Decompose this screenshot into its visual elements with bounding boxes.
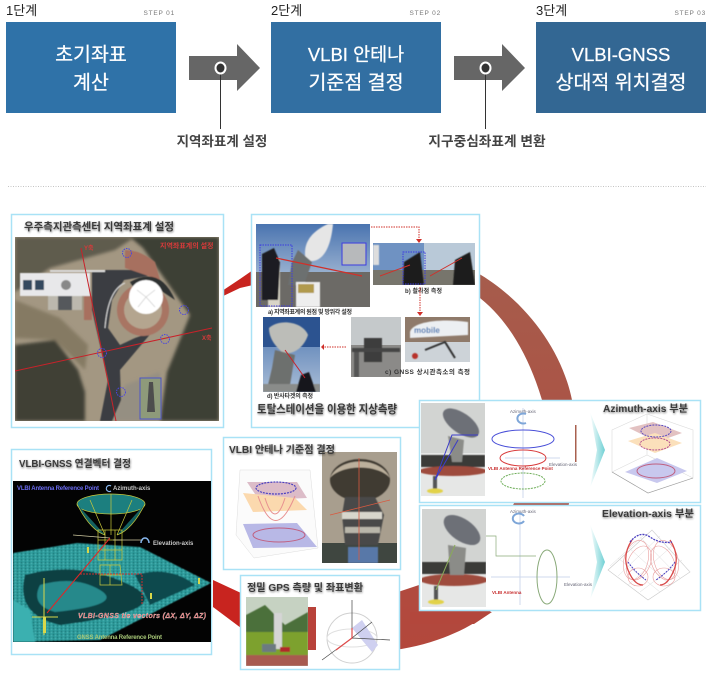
step 1 label: 1단계 (6, 3, 37, 18)
antenna render (421, 403, 485, 496)
antenna render (422, 509, 486, 607)
3D plot (612, 414, 693, 493)
axis ellipses (492, 408, 560, 498)
step 1 box: 계산 (73, 72, 109, 94)
aerial photo: Y축 (84, 244, 94, 252)
step 3 box (536, 22, 706, 113)
step 3 box: VLBI-GNSS (572, 44, 670, 65)
panel title: VLBI-GNSS 연결벡터 결정 (19, 457, 131, 470)
teal arrow (590, 524, 605, 600)
axes and ellipse (486, 512, 570, 605)
azimuth label: Azimuth-axis (510, 509, 537, 514)
panel: elevation-axis (420, 506, 700, 610)
panel: total station survey (252, 214, 480, 428)
photo a (256, 224, 370, 307)
callout: local coordinate setting: 지역좌표계 설정 (177, 134, 267, 149)
step 1 label: STEP 01 (144, 10, 175, 17)
3D plot (236, 470, 318, 558)
point cloud image: VLBI-GNSS tie vectors (ΔX, ΔY, ΔZ) (78, 613, 207, 620)
photo c right (405, 317, 470, 362)
panel title: 정밀 GPS 측량 및 좌표변환 (247, 581, 363, 594)
brown strip (575, 425, 576, 462)
panel: azimuth-axis (419, 400, 700, 502)
antenna photo (322, 452, 397, 563)
step 3 label: STEP 03 (674, 10, 706, 17)
photo c right: mobile (414, 326, 440, 335)
step 2 box: VLBI 안테나 (308, 44, 404, 65)
reference point label: VLBI Antenna (492, 590, 522, 595)
coordinate diagram (322, 600, 390, 663)
aerial photo (15, 237, 219, 421)
aerial photo: 지역좌표계의 설정 (160, 241, 213, 250)
azimuth icon (513, 514, 524, 524)
photo c left (351, 317, 401, 377)
arrow 1 with callout (189, 44, 260, 129)
panel: local coordinate system (12, 214, 224, 428)
photo b (373, 243, 475, 285)
step 2 label: 2단계 (271, 3, 302, 18)
photo d (263, 317, 320, 392)
point cloud image: Azimuth-axis (113, 486, 151, 492)
step 1 box (6, 22, 176, 113)
panel: precise GPS (240, 576, 400, 670)
arrow heads (321, 239, 423, 350)
panel title: Elevation-axis 부분 (602, 508, 694, 520)
elevation label: Elevation-axis (549, 462, 578, 467)
point cloud image (13, 481, 211, 642)
step 2 label (271, 3, 441, 18)
panel: VLBI reference point (224, 438, 400, 570)
panel title: VLBI 안테나 기준점 결정 (229, 443, 335, 456)
step 2 label: STEP 02 (410, 10, 441, 17)
red dashed arrows (324, 227, 420, 347)
3D plot (608, 530, 690, 600)
step 1 box: 초기좌표 (55, 44, 127, 66)
caption b: b) 촬라점 측정 (405, 287, 442, 295)
reference point label: VLBI Antenna Reference Point (488, 466, 553, 471)
caption c: c) GNSS 상시관측소의 측정 (385, 367, 470, 376)
point cloud image: GNSS Antenna Reference Point (77, 635, 162, 641)
step 3 box: 상대적 위치결정 (556, 72, 686, 94)
point cloud image: Elevation-axis (153, 541, 194, 547)
panel: VLBI-GNSS link vector (12, 450, 212, 654)
elevation label: Elevation-axis (564, 582, 593, 587)
process ring (213, 270, 576, 650)
point cloud image: VLBI Antenna Reference Point (17, 486, 99, 492)
step 1 label (6, 3, 175, 18)
step 2 box (271, 22, 441, 113)
teal arrow (590, 412, 605, 488)
callout: geocentric conversion: 지구중심좌표계 변환 (428, 134, 546, 149)
GPS monument photo (246, 597, 308, 666)
azimuth icon (517, 414, 526, 424)
azimuth label: Azimuth-axis (510, 409, 537, 414)
strip (308, 607, 316, 650)
panel title: Azimuth-axis 부분 (603, 403, 688, 415)
panel title: 우주측지관측센터 지역좌표계 설정 (24, 220, 174, 233)
step 3 label: 3단계 (536, 3, 567, 18)
panel title: 토탈스테이션을 이용한 지상측량 (257, 402, 397, 416)
caption a: a) 지역좌표계의 원점 및 방위각 설정 (268, 308, 352, 316)
aerial photo: X축 (202, 334, 212, 342)
arrow 2 with callout (454, 44, 525, 129)
step 2 box: 기준점 결정 (308, 72, 404, 94)
caption d: d) 반사타겟의 측정 (267, 392, 313, 400)
step 3 label (536, 3, 706, 18)
